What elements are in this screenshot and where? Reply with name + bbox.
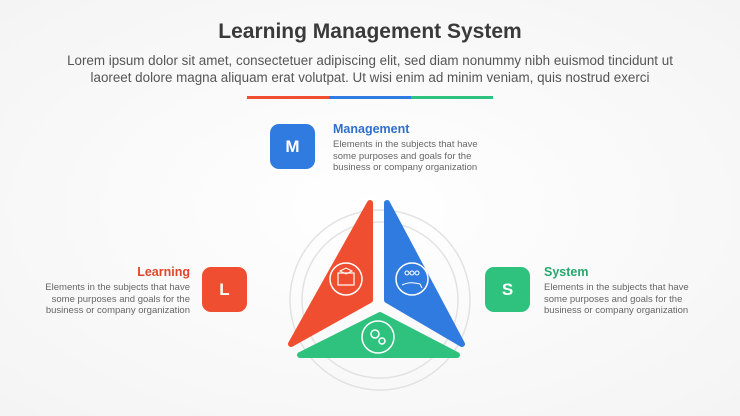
subtitle: Lorem ipsum dolor sit amet, consectetuer adipiscing elit, sed diam nonummy nibh euismod tincidunt ut laoreet dolore magna aliquam erat volutpat. Ut wisi enim ad minim veniam, quis nostrud exerci <box>67 53 673 85</box>
icon: hand people <box>396 263 428 295</box>
box: S: S <box>502 280 513 298</box>
text: Learning: Learning <box>137 265 190 279</box>
segment: learning <box>291 203 370 344</box>
segment: management <box>387 203 462 344</box>
text: Learning: Elements in the subjects that have some purposes and goals for the business or company organization <box>45 282 190 316</box>
segment: system <box>300 315 457 355</box>
text: Learning <box>45 265 190 316</box>
text: System: System <box>544 265 588 279</box>
text: Management: Elements in the subjects that have some purposes and goals for the business or company organization <box>333 139 478 173</box>
title: Learning Management System <box>218 20 522 43</box>
box: L <box>202 267 247 312</box>
box: S <box>485 267 530 312</box>
text: Management <box>333 122 478 173</box>
color underline <box>247 96 493 99</box>
icon: gears <box>362 321 394 353</box>
box: M <box>270 124 315 169</box>
text: System <box>544 265 689 316</box>
icon: book <box>330 263 362 295</box>
text: Management: Management <box>333 122 409 136</box>
box: M: M <box>285 136 300 156</box>
box: L: L <box>219 280 230 298</box>
text: System: Elements in the subjects that have some purposes and goals for the business or company organization <box>544 282 689 316</box>
